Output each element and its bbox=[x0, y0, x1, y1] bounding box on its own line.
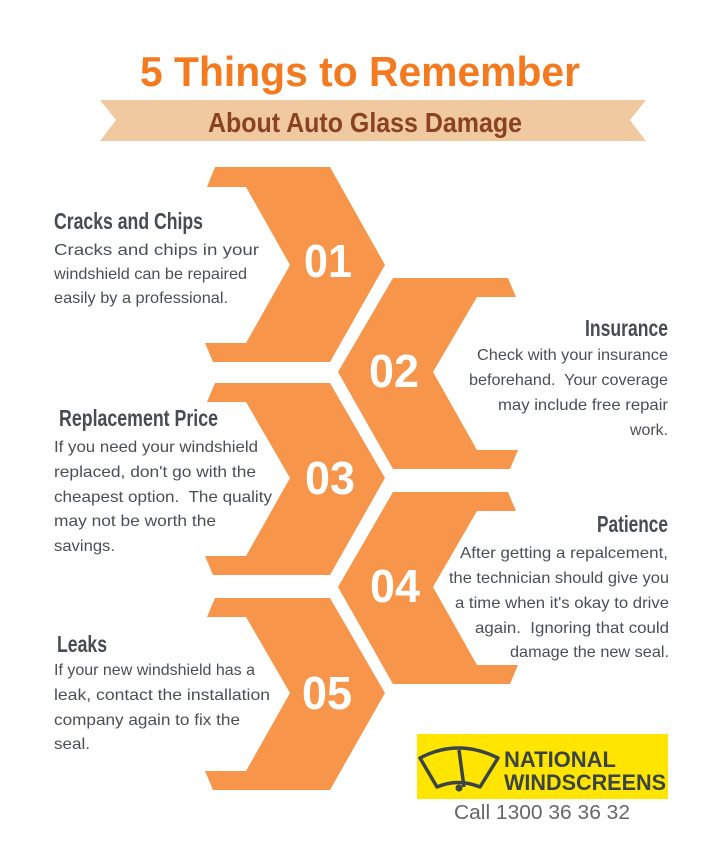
text block: Cracks and Chips: Cracks and Chips bbox=[54, 208, 203, 234]
text block: Patience bbox=[449, 511, 669, 661]
text block: Patience: Patience bbox=[597, 511, 668, 537]
text block: Cracks and Chips: easily by a professional. bbox=[54, 290, 228, 307]
chevron 04: 04 bbox=[370, 560, 420, 612]
text block: Cracks and Chips: windshield can be repaired bbox=[53, 266, 247, 283]
text block: Leaks: company again to fix the bbox=[54, 712, 240, 729]
text block: Replacement Price: cheapest option. The quality bbox=[54, 489, 272, 506]
text block: Leaks bbox=[54, 631, 270, 753]
logo: National Windscreens: NATIONAL bbox=[504, 747, 616, 772]
chevron 02 bbox=[338, 278, 518, 469]
text block: Patience: damage the new seal. bbox=[510, 644, 669, 661]
logo: National Windscreens: WINDSCREENS bbox=[504, 770, 666, 795]
chevron 05 bbox=[205, 598, 385, 790]
text block: Cracks and Chips bbox=[53, 208, 260, 307]
chevron 04 bbox=[338, 492, 518, 684]
text block: Replacement Price: replaced, don't go with the bbox=[54, 464, 256, 481]
text block: Patience: a time when it's okay to drive bbox=[455, 595, 669, 612]
chevron 01: 01 bbox=[304, 235, 352, 287]
title: 5 Things to Remember bbox=[140, 48, 580, 95]
text block: Leaks: Leaks bbox=[57, 631, 107, 657]
chevron 03 bbox=[205, 383, 385, 575]
text block: Insurance: beforehand. Your coverage bbox=[469, 372, 668, 389]
chevron 03: 03 bbox=[305, 452, 355, 504]
subtitle banner: About Auto Glass Damage bbox=[208, 107, 522, 138]
icon: windscreen wiper bbox=[420, 748, 498, 787]
text block: Replacement Price bbox=[54, 405, 272, 555]
text block: Patience: again. Ignoring that could bbox=[475, 620, 669, 637]
text block: Replacement Price: Replacement Price bbox=[59, 405, 218, 431]
text block: Leaks: leak, contact the installation bbox=[54, 687, 270, 704]
text block: Leaks: seal. bbox=[54, 736, 90, 753]
chevron 05: 05 bbox=[302, 667, 352, 719]
text block: Replacement Price: If you need your windshield bbox=[54, 439, 258, 456]
text block: Replacement Price: savings. bbox=[54, 538, 115, 555]
text block: Insurance: Insurance bbox=[585, 315, 668, 341]
text block: Insurance: work. bbox=[629, 422, 668, 439]
logo: National Windscreens bbox=[417, 734, 668, 799]
text block: Cracks and Chips: Cracks and chips in your bbox=[54, 242, 260, 259]
text block: Leaks: If your new windshield has a bbox=[54, 662, 255, 679]
text block: Insurance: may include free repair bbox=[498, 397, 669, 414]
text block: Replacement Price: may not be worth the bbox=[54, 513, 216, 530]
text block: Insurance: Check with your insurance bbox=[477, 347, 668, 364]
chevron 01 bbox=[205, 167, 385, 362]
text block: Patience: After getting a repalcement, bbox=[460, 545, 668, 562]
call text: Call 1300 36 36 32 bbox=[454, 802, 630, 824]
chevron 02: 02 bbox=[369, 345, 419, 397]
text block: Patience: the technician should give you bbox=[449, 570, 669, 587]
subtitle banner bbox=[100, 100, 646, 141]
text block: Insurance bbox=[469, 315, 669, 439]
